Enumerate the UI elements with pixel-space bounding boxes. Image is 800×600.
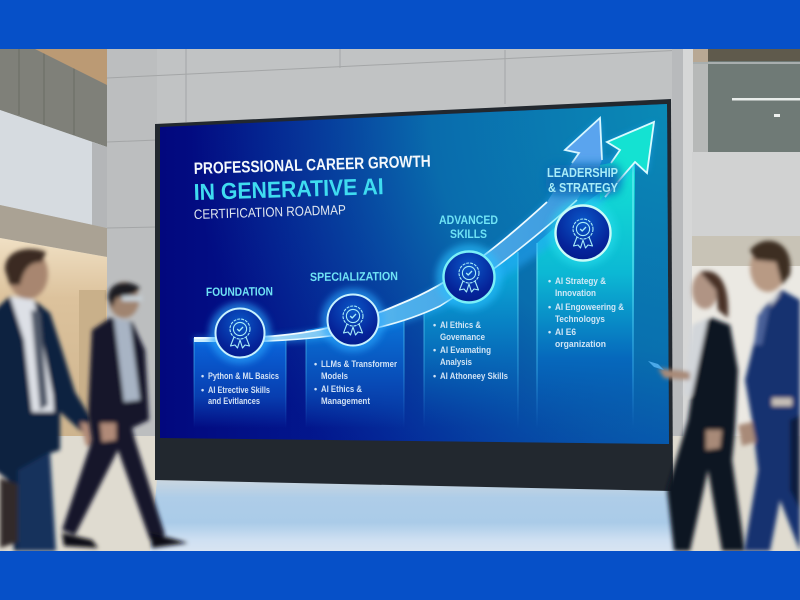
person: woman with phone — [658, 271, 745, 551]
bullet list: advanced skills: AI Athoneey Skills — [440, 371, 508, 381]
bullet list: specialization: LLMs & Transformer — [321, 359, 397, 369]
stage label: leadership and strategy — [547, 165, 618, 195]
stage label: advanced skills: ADVANCED — [439, 213, 498, 227]
bullet list: specialization: Management — [321, 396, 370, 406]
bullet list: advanced skills: • — [433, 371, 436, 381]
bullet list: advanced skills: Govemance — [440, 332, 485, 342]
bullet list: foundation — [201, 371, 279, 406]
bullet list: advanced skills: Analysis — [440, 357, 472, 367]
bullet list: foundation: and Evitlances — [208, 396, 260, 406]
screen — [160, 104, 669, 444]
bullet list: leadership and strategy: • — [548, 327, 551, 337]
bullet list: specialization: • — [314, 384, 317, 394]
phone — [648, 361, 664, 370]
node: leadership badge — [549, 199, 617, 267]
bullet list: leadership and strategy: organization — [555, 339, 606, 349]
bar column: specialization — [306, 312, 404, 428]
bullet list: advanced skills — [433, 320, 508, 381]
bullet list: leadership and strategy — [548, 276, 624, 349]
stage label: leadership and strategy: LEADERSHIP — [547, 165, 618, 180]
bar column: leadership and strategy — [537, 162, 635, 428]
stage label: advanced skills: SKILLS — [450, 227, 487, 241]
top blue band — [0, 0, 800, 49]
bullet list: leadership and strategy: AI E6 — [555, 327, 576, 337]
title block: CERTIFICATION ROADMAP — [194, 202, 346, 222]
bullet list: specialization: • — [314, 359, 317, 369]
bullet list: leadership and strategy: • — [548, 276, 551, 286]
node: specialization badge — [321, 288, 385, 352]
bullet list: leadership and strategy: AI Strategy & — [555, 276, 606, 286]
node: foundation badge — [209, 302, 271, 364]
bullet list: foundation: AI Etrective Skills — [208, 385, 270, 395]
title block: PROFESSIONAL CAREER GROWTH — [194, 153, 431, 178]
stage label: foundation: FOUNDATION — [206, 284, 273, 299]
bullet list: advanced skills: • — [433, 320, 436, 330]
bullet list: specialization — [314, 359, 397, 406]
bullet list: leadership and strategy: • — [548, 302, 551, 312]
bullet list: leadership and strategy: Technologys — [555, 314, 605, 324]
title block — [193, 153, 431, 222]
bullet list: leadership and strategy: AI Engoweering & — [555, 302, 624, 312]
stage label: specialization: SPECIALIZATION — [310, 269, 398, 284]
person: man walking behind — [62, 282, 188, 548]
bullet list: advanced skills: AI Evamating — [440, 345, 491, 355]
growth curve ribbon with arrows — [194, 118, 655, 342]
bullet list: specialization: Models — [321, 371, 348, 381]
bar column: advanced skills — [424, 252, 518, 428]
bullet list: foundation: • — [201, 371, 204, 381]
title block: IN GENERATIVE AI — [193, 173, 384, 205]
label backing glow — [546, 165, 620, 194]
bullet list: foundation: Python & ML Basics — [208, 371, 279, 381]
bottom blue band — [0, 551, 800, 600]
bullet list: leadership and strategy: Innovation — [555, 288, 596, 298]
bullet list: advanced skills: AI Ethics & — [440, 320, 481, 330]
bar column: foundation — [194, 338, 286, 428]
bullet list: advanced skills: • — [433, 345, 436, 355]
person: man in blue suit right foreground — [738, 241, 800, 551]
bullet list: specialization: AI Ethics & — [321, 384, 362, 394]
digital billboard frame — [155, 99, 673, 491]
bullet list: foundation: • — [201, 385, 204, 395]
stage label: advanced skills — [439, 213, 498, 241]
person: man walking left foreground — [0, 249, 100, 551]
node: advanced skills badge — [436, 244, 502, 310]
stage label: leadership and strategy: & STRATEGY — [548, 180, 618, 195]
